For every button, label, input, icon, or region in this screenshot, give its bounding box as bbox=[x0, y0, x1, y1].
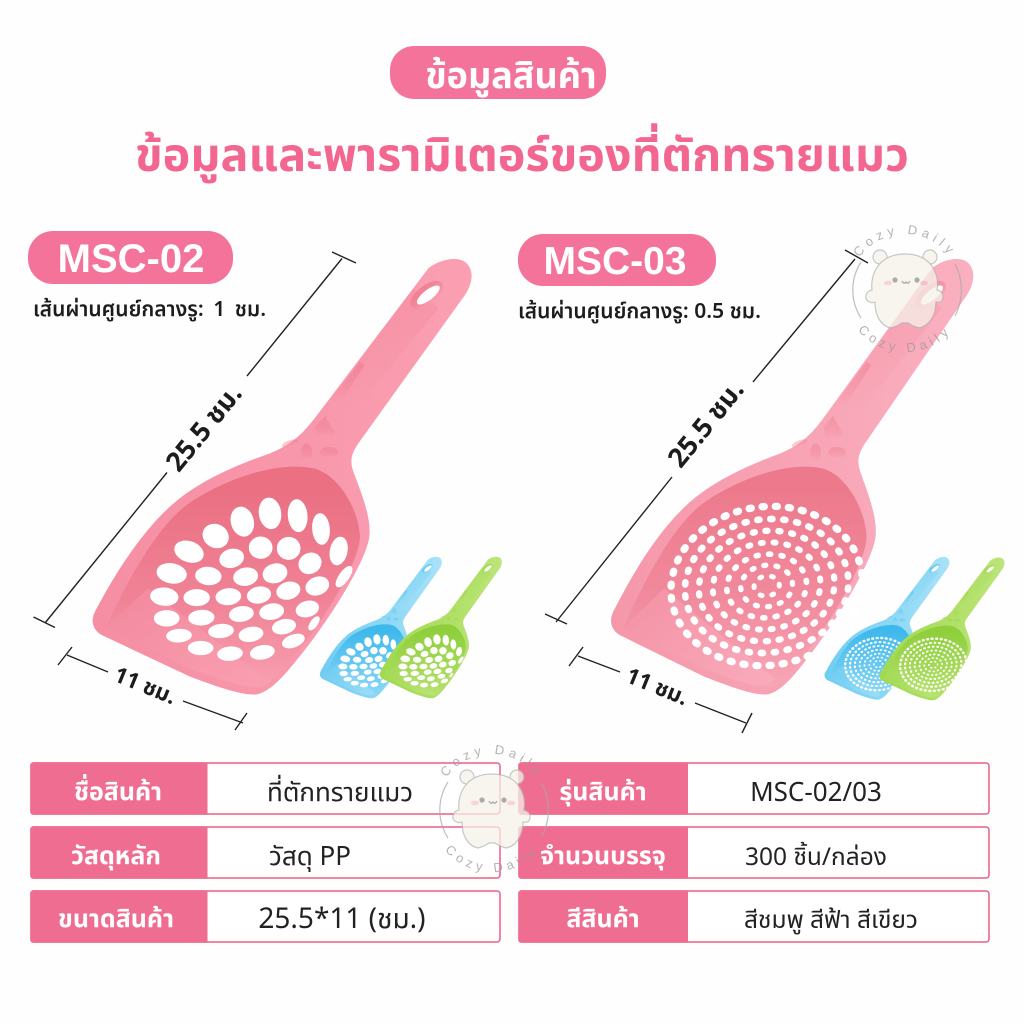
hole diameter note MSC-02: เส้นผ่านศูนย์กลางรู: 1 ชม. bbox=[33, 295, 266, 326]
pink scoop with large holes bbox=[93, 259, 472, 695]
row: model: รุ่นสินค้า bbox=[559, 774, 647, 812]
green mini scoop bbox=[380, 557, 502, 698]
panel: MSC-02 bbox=[28, 231, 502, 730]
hole diameter note MSC-03: เส้นผ่านศูนย์กลางรู: 0.5 ชม. bbox=[518, 297, 761, 328]
width label: 11 ชม. bbox=[621, 660, 693, 715]
row: model: MSC-02/03 bbox=[750, 773, 882, 813]
blue mini scoop bbox=[320, 557, 442, 698]
watermark: Cozy Daily over table bbox=[439, 745, 549, 873]
model badge MSC-03: MSC-03 bbox=[543, 240, 687, 283]
row: colours bbox=[518, 890, 989, 943]
row: product name: ที่ตักทรายแมว bbox=[267, 773, 413, 813]
width dimension line bbox=[58, 647, 247, 730]
row: quantity: จำนวนบรรจุ bbox=[540, 838, 666, 876]
watermark: Cozy Daily top right bbox=[852, 225, 962, 353]
blue mini scoop bbox=[825, 557, 949, 700]
row: product size: ขนาดสินค้า bbox=[58, 901, 174, 939]
width label: 11 ชม. bbox=[109, 659, 181, 714]
length dimension line bbox=[34, 252, 356, 628]
panel: specification table left bbox=[30, 762, 500, 943]
row: product name bbox=[30, 762, 500, 815]
row: main material: วัสดุ PP bbox=[269, 837, 351, 877]
green mini scoop bbox=[880, 558, 1004, 700]
length label: 25.5 ชม. bbox=[659, 372, 755, 478]
row: product size: 25.5*11 (ชม.) bbox=[258, 898, 426, 941]
row: colours: สีชมพู สีฟ้า สีเขียว bbox=[744, 903, 918, 940]
width dimension line bbox=[569, 647, 752, 733]
title: ข้อมูลและพารามิเตอร์ของที่ตักทรายแมว bbox=[135, 122, 909, 192]
row: product size bbox=[30, 890, 500, 943]
header pill: ข้อมูลสินค้า bbox=[425, 51, 597, 105]
row: main material: วัสดุหลัก bbox=[71, 838, 161, 876]
model badge MSC-02 bbox=[28, 231, 233, 284]
row: colours: สีสินค้า bbox=[566, 901, 640, 939]
row: product name: ชื่อสินค้า bbox=[74, 774, 162, 812]
row: main material bbox=[30, 826, 500, 879]
watermark: Cozy Daily top right: Cozy Daily bbox=[854, 225, 954, 256]
length dimension line bbox=[545, 250, 868, 624]
watermark: Cozy Daily over table: Cozy Daily bbox=[441, 745, 540, 776]
model badge MSC-02: MSC-02 bbox=[58, 237, 204, 281]
panel: MSC-03 bbox=[518, 234, 1004, 733]
row: model bbox=[518, 762, 989, 815]
panel: specification table right bbox=[518, 762, 989, 943]
length label: 25.5 ชม. bbox=[157, 376, 253, 482]
watermark: Cozy Daily top right: Cozy Daily bbox=[860, 326, 948, 353]
row: quantity: 300 ชิ้น/กล่อง bbox=[745, 840, 887, 877]
row: quantity bbox=[518, 826, 989, 879]
model badge MSC-03 bbox=[518, 234, 716, 286]
watermark: Cozy Daily over table: Cozy Daily bbox=[446, 846, 535, 873]
pink scoop with small holes bbox=[611, 259, 973, 695]
